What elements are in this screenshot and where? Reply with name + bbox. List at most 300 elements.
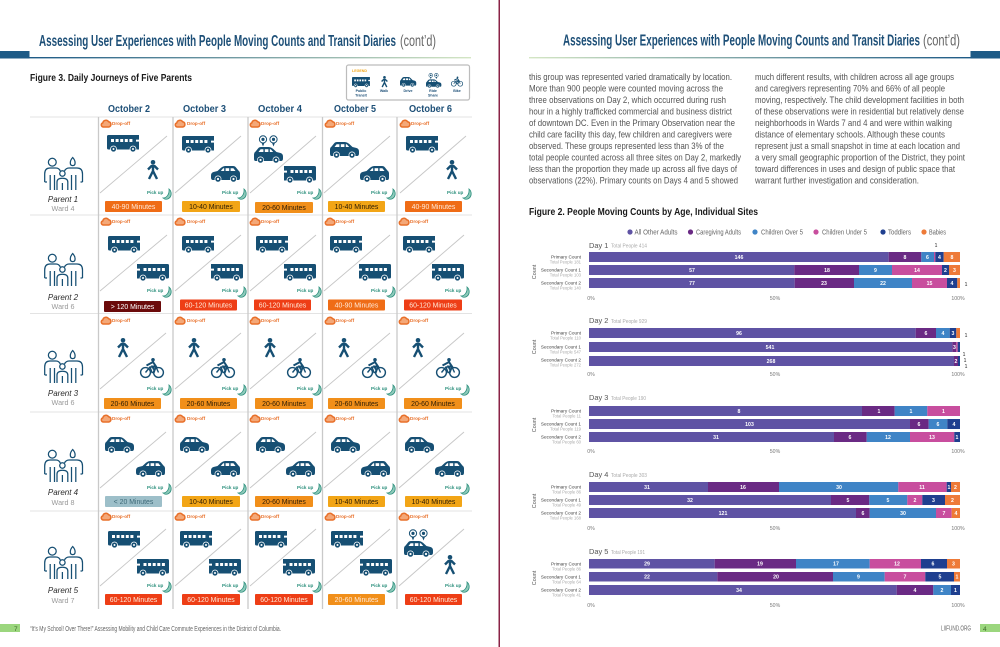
chart: day 1: Total People 140: [550, 286, 582, 290]
bar: day 5 secondary 2: 2: [941, 588, 944, 594]
chart: day 2: Secondary Count 1: [541, 344, 581, 350]
cell: parent 5 october 2: 60-120 Minutes: [110, 597, 158, 604]
panel: parent 2 row: [45, 218, 469, 312]
label: public transit: Public: [356, 89, 366, 93]
chart legend: Children Over 5: [761, 230, 803, 236]
text block: right column: of these observations were in residential but relatively dense: [755, 106, 964, 116]
chart: day 3: Total People 60: [552, 440, 582, 444]
bar: day 1 primary: 6: [926, 255, 929, 261]
icon and label: parent 1: Ward 4: [52, 204, 74, 213]
bar: day 5 secondary 2: [589, 585, 960, 595]
text block: right column: toward differences in uses and design of public space that: [755, 164, 955, 174]
bar: day 4 primary: 30: [836, 485, 842, 491]
chart legend: Children Under 5: [822, 230, 867, 236]
bar: day 3 secondary 2: 13: [929, 435, 935, 441]
icon and label: parent 3: Parent 3: [48, 389, 79, 398]
page divider: [498, 0, 500, 647]
chart: day 2: Primary Count: [551, 330, 582, 336]
chart: day 5: Day 5: [589, 547, 608, 556]
cell: parent 5 october 4: Drop-off: [261, 514, 280, 519]
cell: parent 4 october 2: < 20 Minutes: [114, 499, 154, 506]
bar: day 1 secondary 2: 1: [965, 282, 968, 288]
cell: parent 2 october 6: Pick up: [445, 288, 462, 293]
text block: left column: More than 900 people were counted moving across the: [529, 84, 723, 94]
bar: day 4 secondary 2: [589, 508, 960, 518]
cell: parent 1 october 5: [324, 120, 395, 212]
cell: parent 1 october 4: Drop-off: [261, 121, 280, 126]
chart legend: All Other Adults: [634, 230, 678, 236]
chart: day 3: [532, 393, 965, 455]
icon and label: parent 2: [45, 254, 82, 311]
cell: parent 4 october 5: 10-40 Minutes: [335, 499, 379, 506]
bar: day 2 secondary 2: 1: [965, 364, 968, 370]
bar: day 4 secondary 1: 2: [951, 498, 954, 504]
chart: day 2: Secondary Count 2: [541, 358, 581, 362]
bar: day 1 primary: 4: [938, 255, 941, 261]
cell: parent 5 october 3: Drop-off: [187, 514, 206, 519]
title rule left: [0, 51, 471, 58]
text block: right column: represent just a small snapshot in time at each location and: [755, 141, 960, 151]
cell: parent 4 october 4: 20-60 Minutes: [262, 499, 306, 506]
cell: parent 2 october 5: Pick up: [371, 288, 388, 293]
chart: day 5: 100%: [951, 603, 965, 609]
cell: parent 4 october 4: Pick up: [297, 485, 314, 490]
bar: day 3 secondary 2: [589, 432, 960, 442]
cell: parent 3 october 2: Drop-off: [112, 318, 131, 323]
cell: parent 1 october 2: 40-90 Minutes: [112, 204, 156, 211]
bar: day 5 secondary 1: 22: [644, 574, 650, 580]
bar: day 1 secondary 2: 23: [821, 281, 827, 287]
cell: parent 4 october 6: Pick up: [445, 485, 462, 490]
chart: day 1: Total People 414: [611, 244, 647, 250]
text block: right column: warrant further investigation and consideration.: [754, 176, 919, 186]
bar: day 2 secondary 1: 1: [963, 352, 966, 358]
bar: day 2 secondary 1: 3: [953, 345, 956, 351]
column headings: dates: [108, 103, 452, 115]
chart: day 3: Total People 11: [552, 414, 582, 418]
title left: Assessing User Experiences with People Moving Counts and Transit Diaries: [39, 33, 396, 50]
bar: day 5 primary: 19: [757, 562, 763, 568]
cell: parent 3 october 5: 20-60 Minutes: [335, 401, 379, 408]
bar: day 3 primary: 1: [942, 409, 945, 415]
chart: day 1: 100%: [951, 296, 965, 302]
bar: day 4 secondary 1: 32: [687, 498, 693, 504]
chart: day 4: Total People 49: [552, 502, 582, 508]
text block: right column: a very small geographic proportion of the District, they point: [755, 152, 965, 162]
bar: day 1 secondary 1: [589, 265, 960, 275]
cell: parent 5 october 4: [250, 513, 321, 605]
icon and label: parent 4: Ward 8: [52, 498, 74, 507]
cell: parent 2 october 4: 60-120 Minutes: [259, 302, 307, 310]
chart: day 1: Day 1: [589, 241, 608, 250]
bar: day 1 secondary 1: 3: [953, 268, 956, 274]
cell: parent 1 october 2: Drop-off: [112, 121, 131, 126]
bar: day 2 primary: 3: [952, 331, 955, 337]
bar: day 5 secondary 1: 9: [857, 574, 860, 580]
icon and label: parent 2: Parent 2: [48, 293, 79, 302]
cell: parent 4 october 3: 10-40 Minutes: [189, 499, 233, 506]
cell: parent 2 october 4: [250, 218, 321, 310]
text block: left column: observed. These groups represented less than 3% of the: [529, 141, 724, 151]
bar: day 1 secondary 1: 14: [914, 268, 920, 274]
chart: day 3: Secondary Count 2: [541, 434, 581, 440]
cell: parent 2 october 5: 40-90 Minutes: [335, 302, 379, 310]
chart: day 4: Secondary Count 2: [541, 510, 581, 516]
bar: day 4 secondary 1: 3: [932, 498, 935, 504]
cell: parent 4 october 3: Pick up: [222, 485, 239, 490]
chart: day 5: 0%: [587, 603, 595, 609]
bar: day 5 primary: 6: [932, 562, 935, 568]
bar: day 2 secondary 1: [589, 342, 966, 358]
icon and label: parent 1: Parent 1: [48, 195, 78, 204]
label: ride share: Share: [428, 93, 438, 97]
cell: parent 1 october 2: Pick up: [147, 190, 164, 195]
cell: parent 5 october 3: 60-120 Minutes: [187, 597, 235, 604]
chart: day 1: Total People 103: [550, 272, 582, 278]
bar: day 5 secondary 1: [589, 572, 960, 582]
chart: day 5: Total People 64: [552, 580, 582, 584]
cell: parent 3 october 3: Drop-off: [187, 318, 206, 323]
cell: parent 5 october 5: [324, 513, 395, 605]
cell: parent 1 october 6: Drop-off: [411, 121, 430, 126]
cell: parent 3 october 5: Drop-off: [336, 318, 355, 323]
left page header: [0, 33, 471, 58]
footer right: LIIFUND.ORG: [941, 626, 971, 632]
column headings: dates: October 6: [409, 103, 452, 115]
cell: parent 4 october 4: [250, 415, 321, 507]
column headings: dates: October 4: [258, 103, 302, 115]
text block: left column: less than the proportion they made up across all five days of: [529, 164, 737, 174]
bar: day 5 secondary 1: 1: [956, 574, 959, 580]
cell: parent 4 october 5: Drop-off: [336, 416, 355, 421]
bar: day 1 secondary 2: [589, 278, 968, 288]
cell: parent 2 october 3: Pick up: [222, 288, 239, 293]
cell: parent 2 october 6: [399, 218, 469, 310]
cell: parent 1 october 3: Pick up: [222, 190, 239, 195]
cell: parent 2 october 3: [175, 218, 246, 310]
chart: day 1: 50%: [770, 296, 781, 302]
bar: day 4 secondary 2: 30: [900, 511, 906, 517]
chart: day 1: [532, 241, 968, 302]
cell: parent 5 october 3: [175, 513, 246, 605]
cell: parent 1 october 6: 40-90 Minutes: [412, 204, 456, 211]
chart: day 5: Total People 86: [552, 566, 582, 572]
bar: day 3 secondary 1: [589, 419, 960, 429]
bar: day 2 primary: 4: [942, 331, 945, 337]
text block: left column: child care facility this day, few children and caregivers were: [529, 130, 732, 140]
cell: parent 4 october 2: Pick up: [147, 485, 164, 490]
right page header: [529, 32, 1000, 58]
text block: left column: three observations on Day 2, which occurred during rush: [529, 95, 726, 105]
bar: day 4 primary: 2: [954, 485, 957, 491]
chart: day 5: Secondary Count 1: [541, 574, 581, 580]
heading: figure 2: Figure 2. People Moving Counts by Age, Individual Sites: [529, 207, 758, 218]
title right: (cont’d): [923, 32, 960, 50]
cell: parent 1 october 6: Pick up: [447, 190, 464, 195]
bar: day 3 secondary 1: 6: [918, 422, 921, 428]
label: public transit: Transit: [355, 93, 368, 97]
chart: day 3: 0%: [587, 449, 595, 455]
cell: parent 4 october 2: Drop-off: [112, 416, 131, 421]
chart: day 1: Count: [532, 264, 538, 279]
chart: day 2: 0%: [587, 372, 595, 378]
cell: parent 1 october 5: Drop-off: [336, 121, 355, 126]
bar: day 5 primary: 17: [833, 562, 839, 568]
bar: day 2 primary: 6: [925, 331, 928, 337]
cell: parent 1 october 2: [100, 120, 171, 212]
bar: day 3 secondary 2: 6: [849, 435, 852, 441]
bar: day 1 primary: 8: [904, 255, 907, 261]
chart legend: Caregiving Adults: [696, 230, 741, 236]
footer left: “It’s My School! Over There!” Assessing Mobility and Child Care Commute Experiences in the District of Columbia.: [30, 626, 281, 633]
footer left: 7: [14, 626, 18, 633]
chart: day 3: Day 3: [589, 393, 608, 402]
chart: day 4: 50%: [770, 526, 781, 532]
cell: parent 5 october 6: 60-120 Minutes: [410, 597, 458, 604]
icon and label: parent 5: [45, 546, 82, 605]
bar: day 2 primary: 96: [736, 331, 742, 337]
bar: day 5 primary: [589, 559, 960, 568]
cell: parent 4 october 2: [100, 415, 171, 507]
bar: day 4 secondary 1: [589, 495, 960, 505]
bar: day 1 primary: 8: [951, 255, 954, 261]
chart: day 4: 0%: [587, 526, 595, 532]
bar: day 5 secondary 2: 4: [914, 588, 917, 594]
chart: day 4: 100%: [951, 526, 965, 532]
bar: day 4 secondary 2: 6: [862, 511, 865, 517]
chart: day 3: 50%: [770, 449, 781, 455]
cell: parent 1 october 4: 20-60 Minutes: [262, 205, 306, 212]
bar: day 5 secondary 2: 1: [954, 588, 957, 594]
icon and label: parent 5: Ward 7: [52, 596, 74, 605]
cell: parent 4 october 3: Drop-off: [187, 416, 206, 421]
chart: day 5: 50%: [770, 603, 781, 609]
bar: day 2 secondary 1: 541: [766, 345, 774, 351]
cell: parent 3 october 6: 20-60 Minutes: [411, 401, 455, 408]
bar: day 3 secondary 1: 103: [745, 422, 754, 428]
column headings: dates: October 2: [108, 103, 150, 115]
cell: parent 5 october 4: 60-120 Minutes: [260, 597, 308, 604]
column headings: dates: October 5: [334, 103, 376, 115]
chart: day 4: Secondary Count 1: [541, 498, 581, 502]
bar: day 5 secondary 2: 34: [736, 588, 742, 594]
panel: parent 3 row: [45, 317, 469, 409]
chart: day 2: Total People 110: [550, 336, 582, 340]
cell: parent 1 october 5: Pick up: [371, 190, 388, 195]
cell: parent 2 october 2: Drop-off: [112, 219, 131, 224]
chart: day 3: Primary Count: [551, 408, 582, 414]
cell: parent 2 october 5: [324, 218, 395, 310]
chart legend: Babies: [929, 230, 946, 236]
chart: day 4: Day 4: [589, 470, 608, 479]
cell: parent 4 october 6: 10-40 Minutes: [412, 499, 456, 506]
bar: day 4 primary: [589, 482, 960, 492]
cell: parent 4 october 5: [324, 415, 395, 507]
cell: parent 1 october 3: Drop-off: [187, 121, 206, 126]
bar: day 3 primary: 1: [910, 409, 913, 415]
bar: day 5 secondary 1: 5: [939, 574, 942, 580]
bar: day 1 primary: [589, 243, 960, 262]
cell: parent 5 october 5: Drop-off: [336, 514, 355, 519]
bar: day 1 secondary 2: 15: [927, 281, 932, 287]
chart: day 2: Day 2: [589, 316, 608, 325]
cell: parent 3 october 4: Drop-off: [261, 318, 280, 323]
cell: parent 2 october 6: Drop-off: [410, 219, 429, 224]
footer right: [941, 624, 1000, 633]
bar: day 4 primary: 16: [740, 485, 746, 491]
bar: day 3 secondary 2: 12: [885, 435, 891, 441]
bar: day 3 primary: 1: [878, 409, 881, 415]
cell: parent 1 october 4: [250, 120, 321, 213]
cell: parent 5 october 5: Pick up: [371, 583, 388, 588]
chart: day 1: Secondary Count 1: [541, 268, 581, 272]
cell: parent 1 october 4: Pick up: [297, 190, 314, 195]
title rule right: [529, 51, 1000, 58]
bar: day 2 secondary 2: 1: [964, 358, 967, 364]
cell: parent 3 october 6: [399, 317, 469, 409]
bar: day 1 secondary 1: 9: [874, 268, 877, 274]
chart: day 3: 100%: [951, 449, 965, 455]
title left: (cont’d): [400, 33, 436, 50]
bar: day 2 primary: [589, 328, 968, 339]
cell: parent 2 october 4: Drop-off: [261, 219, 280, 224]
cell: parent 3 october 5: Pick up: [371, 386, 388, 391]
cell: parent 4 october 5: Pick up: [371, 485, 388, 490]
cell: parent 1 october 6: [400, 120, 471, 212]
chart: day 1: Secondary Count 2: [541, 280, 581, 286]
icon: ride share: [426, 73, 441, 88]
text block: right column: neighborhoods in Wards 7 and 4 and were within walking: [755, 118, 952, 128]
cell: parent 2 october 2: [100, 218, 171, 312]
icon and label: parent 5: Parent 5: [48, 586, 79, 595]
cell: parent 5 october 4: Pick up: [297, 583, 314, 588]
chart: day 4: Primary Count: [551, 484, 582, 490]
text block: left column: this group was represented varied dramatically by location.: [529, 72, 732, 82]
bar: day 1 secondary 1: 57: [689, 268, 695, 274]
cell: parent 4 october 6: Drop-off: [410, 416, 429, 421]
cell: parent 5 october 6: Drop-off: [410, 514, 429, 519]
text block: left column: total people counted across all three sites on Day 2, markedly: [529, 152, 741, 162]
chart: day 4: [532, 470, 965, 532]
bar: day 4 secondary 1: 5: [887, 498, 890, 504]
bar: day 3 primary: [589, 406, 960, 416]
cell: parent 3 october 2: 20-60 Minutes: [111, 401, 155, 408]
bar: day 2 secondary 2: [589, 356, 968, 370]
cell: parent 5 october 2: [100, 513, 171, 605]
cell: parent 3 october 4: 20-60 Minutes: [262, 401, 306, 408]
cell: parent 5 october 2: Drop-off: [112, 514, 131, 519]
cell: parent 2 october 3: 60-120 Minutes: [185, 302, 233, 310]
cell: parent 3 october 3: Pick up: [222, 386, 239, 391]
text block: right column: moving, respectively. The child development facilities in both: [755, 95, 964, 105]
chart: day 3: Count: [532, 417, 538, 432]
bar: day 5 secondary 1: 7: [904, 574, 907, 580]
footer right: 4: [983, 626, 987, 633]
label: bike: Bike: [453, 89, 461, 93]
chart: day 2: 50%: [770, 372, 781, 378]
cell: parent 5 october 2: Pick up: [147, 583, 164, 588]
chart: day 4: Total People 86: [552, 490, 582, 494]
icon and label: parent 2: Ward 6: [52, 302, 74, 311]
cell: parent 2 october 2: Pick up: [147, 288, 164, 293]
chart: day 5: [532, 547, 965, 609]
chart: day 3: Total People 119: [550, 426, 582, 432]
bar: day 5 secondary 1: 20: [773, 574, 779, 580]
cell: parent 5 october 5: 20-60 Minutes: [335, 597, 379, 604]
text block: left column: of downtown DC. Even in the Primary Observation near the: [529, 118, 735, 128]
bar: day 4 secondary 1: 2: [914, 498, 917, 504]
chart: day 1: 0%: [587, 296, 595, 302]
cell: parent 2 october 5: Drop-off: [336, 219, 355, 224]
panel: parent 4 row: [45, 415, 469, 507]
chart: day 5: Total People 191: [611, 550, 645, 556]
text block: right column: much different results, with children across all age groups: [755, 72, 954, 82]
bar: day 4 secondary 2: 121: [719, 511, 727, 517]
chart: day 2: Total People 929: [611, 319, 647, 325]
icon and label: parent 1: [45, 158, 82, 213]
panel: parent 1 row: [45, 120, 471, 213]
bar: day 1 secondary 2: 4: [951, 281, 954, 287]
bar: day 5 primary: 12: [894, 562, 900, 568]
cell: parent 5 october 6: Pick up: [445, 583, 462, 588]
chart: day 2: 100%: [951, 372, 965, 378]
icon and label: parent 3: Ward 6: [52, 398, 74, 407]
cell: parent 3 october 2: [100, 317, 171, 409]
bar: day 5 primary: 3: [952, 562, 955, 568]
cell: parent 2 october 3: Drop-off: [187, 219, 206, 224]
bar: day 3 secondary 1: 6: [937, 422, 940, 428]
icon and label: parent 4: [45, 450, 82, 507]
bar: day 1 primary: 146: [735, 255, 743, 261]
bar: day 1 secondary 1: 18: [824, 268, 830, 274]
cell: parent 1 october 3: [175, 120, 246, 212]
chart: day 1: Primary Count: [551, 254, 582, 260]
cell: parent 2 october 2: > 120 Minutes: [111, 304, 155, 311]
chart legend: [627, 229, 946, 236]
icon and label: parent 4: Parent 4: [48, 488, 79, 497]
chart: day 2: Total People 547: [550, 350, 582, 354]
bar: day 3 secondary 2: 31: [713, 435, 719, 441]
heading: figure 3: Figure 3. Daily Journeys of Five Parents: [30, 73, 192, 84]
cell: parent 2 october 4: Pick up: [297, 288, 314, 293]
cell: parent 3 october 6: Drop-off: [410, 318, 429, 323]
cell: parent 3 october 3: 20-60 Minutes: [187, 401, 231, 408]
bar: day 1 primary: 1: [935, 243, 938, 249]
label: walk: Walk: [380, 89, 388, 93]
icon: bike: [451, 76, 463, 86]
legend: travel modes: [346, 65, 470, 100]
cell: parent 4 october 4: Drop-off: [261, 416, 280, 421]
chart legend: Toddlers: [888, 230, 911, 236]
chart: day 2: Count: [532, 339, 538, 354]
bar: day 2 secondary 2: 268: [767, 359, 775, 365]
bar: day 1 secondary 2: 77: [689, 281, 695, 287]
label: drive: Drive: [404, 89, 412, 93]
cell: parent 3 october 5: [324, 317, 395, 409]
bar: day 1 secondary 2: 22: [880, 281, 886, 287]
icon: drive: [400, 77, 416, 87]
icon and label: parent 3: [45, 350, 82, 407]
panel: parent 5 row: [45, 513, 469, 605]
bar: day 4 secondary 1: 5: [847, 498, 850, 504]
chart: day 2: [532, 316, 968, 378]
chart: day 4: Total People 168: [550, 516, 582, 520]
cell: parent 5 october 6: [399, 513, 469, 605]
bar: day 4 primary: 31: [644, 485, 650, 491]
bar: day 3 primary: 8: [738, 409, 741, 415]
bar: day 4 primary: 11: [919, 485, 925, 491]
cell: parent 3 october 2: Pick up: [147, 386, 164, 391]
